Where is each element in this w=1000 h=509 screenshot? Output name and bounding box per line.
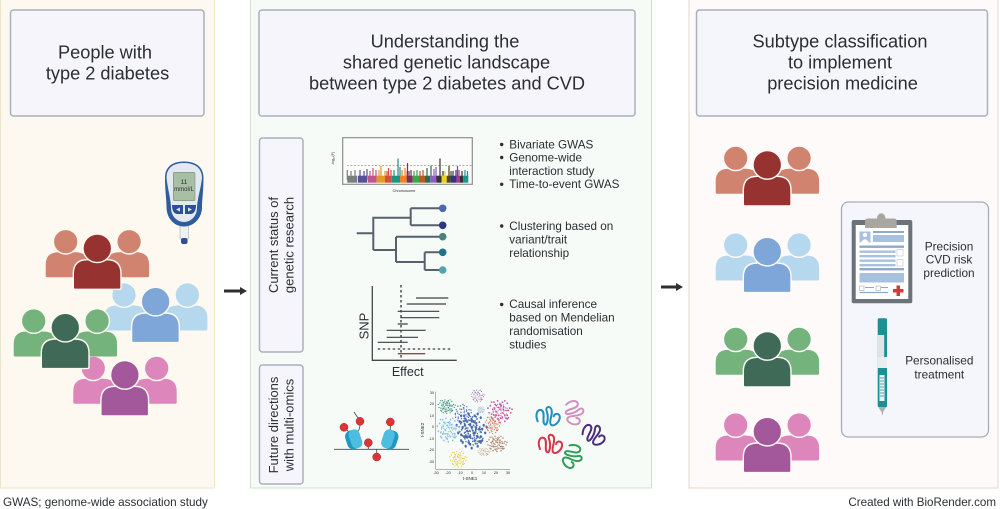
heading box: subtype classification: to implement — [788, 52, 892, 72]
heading box: subtype classification — [696, 10, 988, 116]
icon: glucose meter — [165, 162, 204, 244]
chart: t-SNE scatter: 30 — [506, 471, 510, 475]
icon: glucose meter: mmol/L — [174, 187, 194, 193]
chart: t-SNE scatter: 0 — [471, 471, 473, 475]
chart: t-SNE scatter: 10 — [430, 414, 434, 418]
text: GWAS approaches: Time-to-event GWAS — [509, 178, 620, 191]
people group: blue — [104, 283, 207, 343]
text: causal inference: based on Mendelian — [509, 312, 615, 324]
panel: genetic landscape — [250, 0, 652, 488]
side label: future directions with multi-omics: Future directions — [266, 376, 281, 473]
panel: people with type 2 diabetes — [0, 0, 214, 488]
text: personalised treatment: treatment — [914, 368, 965, 382]
text: clustering — [500, 220, 613, 260]
people group: pink — [73, 356, 177, 416]
heading box: understanding the shared genetic landscape: between type 2 diabetes and CVD — [309, 74, 585, 94]
icon: nucleosomes with methylation — [334, 412, 409, 461]
chart: t-SNE scatter: -20 — [445, 471, 451, 475]
people group: red — [46, 229, 149, 289]
heading box: subtype classification: precision medicine — [767, 74, 918, 94]
chart: t-SNE scatter: -20 — [428, 448, 434, 452]
text: GWAS approaches: Genome-wide — [509, 152, 582, 164]
side label: future directions with multi-omics: with multi-omics — [282, 378, 296, 472]
text: GWAS approaches: Bivariate GWAS — [509, 138, 594, 152]
chart: t-SNE scatter: -30 — [433, 471, 439, 475]
heading box: people with type 2 diabetes — [10, 10, 204, 116]
chart: Manhattan plot — [331, 138, 472, 193]
people group: green subtype — [716, 327, 819, 387]
side label: current status of genetic research — [260, 138, 303, 352]
chart: t-SNE scatter: -10 — [457, 471, 463, 475]
people group: green — [14, 309, 117, 369]
arrow: patients to genetics — [224, 287, 247, 295]
panel: subtype classification — [689, 0, 998, 488]
text: causal inference: randomisation — [509, 325, 583, 338]
chart: Mendelian randomisation forest plot: Effect — [392, 365, 424, 379]
chart: t-SNE scatter — [420, 390, 512, 481]
text: causal inference — [500, 298, 615, 352]
chart: t-SNE scatter: 20 — [494, 471, 498, 475]
heading box: people with type 2 diabetes: type 2 diabetes — [46, 64, 169, 84]
text: personalised treatment — [905, 354, 973, 382]
text: causal inference: Causal inference — [509, 298, 597, 311]
text: causal inference: studies — [509, 338, 546, 352]
chart: t-SNE scatter: 20 — [430, 402, 434, 406]
people group: pink subtype — [716, 413, 819, 473]
credit: BioRender: Created with BioRender.com — [848, 496, 996, 509]
chart: t-SNE scatter: 30 — [430, 391, 434, 395]
chart: Mendelian randomisation forest plot: SNP — [356, 313, 372, 339]
heading box: understanding the shared genetic landscape — [259, 10, 635, 116]
people group: blue subtype — [716, 233, 819, 293]
text: precision CVD risk prediction: CVD risk — [926, 252, 972, 266]
chart: t-SNE scatter: -30 — [428, 460, 434, 464]
people group: red subtype — [716, 146, 819, 206]
chart: t-SNE scatter: -10 — [428, 437, 434, 441]
chart: t-SNE scatter: t-SNE2 — [420, 422, 425, 437]
text: precision CVD risk prediction: Precision — [925, 240, 973, 254]
arrow: genetics to subtypes — [661, 283, 683, 291]
side label: current status of genetic research: Current status of — [266, 197, 281, 293]
side label: future directions with multi-omics — [260, 365, 303, 484]
text: GWAS approaches: interaction study — [509, 165, 595, 178]
text: personalised treatment: Personalised — [905, 354, 973, 368]
chart: clustering dendrogram — [357, 204, 447, 274]
text: precision CVD risk prediction — [923, 240, 975, 280]
chart: t-SNE scatter: 0 — [432, 425, 434, 429]
chart: t-SNE scatter: 10 — [482, 471, 486, 475]
heading box: understanding the shared genetic landscape: shared genetic landscape — [343, 52, 550, 72]
heading box: subtype classification: Subtype classification — [753, 32, 927, 52]
icon: glucose meter: 11 — [181, 179, 188, 186]
panel: precision medicine outcomes — [842, 202, 988, 437]
footnote: abbreviation: GWAS; genome-wide association study — [3, 496, 208, 509]
chart: Mendelian randomisation forest plot — [356, 285, 457, 379]
chart: Manhattan plot: Chromosome — [393, 189, 415, 193]
text: precision CVD risk prediction: prediction — [923, 266, 975, 280]
text: clustering: relationship — [509, 247, 570, 260]
text: clustering: Clustering based on — [509, 220, 613, 233]
chart: t-SNE scatter: t-SNE1 — [463, 476, 478, 481]
heading box: people with type 2 diabetes: People with — [58, 42, 152, 62]
text: GWAS approaches — [500, 138, 620, 191]
chart: Manhattan plot: -log₁₀(P) — [331, 152, 335, 165]
side label: current status of genetic research: genetic research — [282, 197, 296, 293]
heading box: understanding the shared genetic landscape: Understanding the — [371, 32, 519, 52]
icon: coloured chromatin tangles — [536, 399, 609, 470]
text: clustering: variant/trait — [509, 234, 568, 246]
icon: clipboard — [852, 213, 912, 303]
icon: insulin pen — [878, 318, 887, 414]
